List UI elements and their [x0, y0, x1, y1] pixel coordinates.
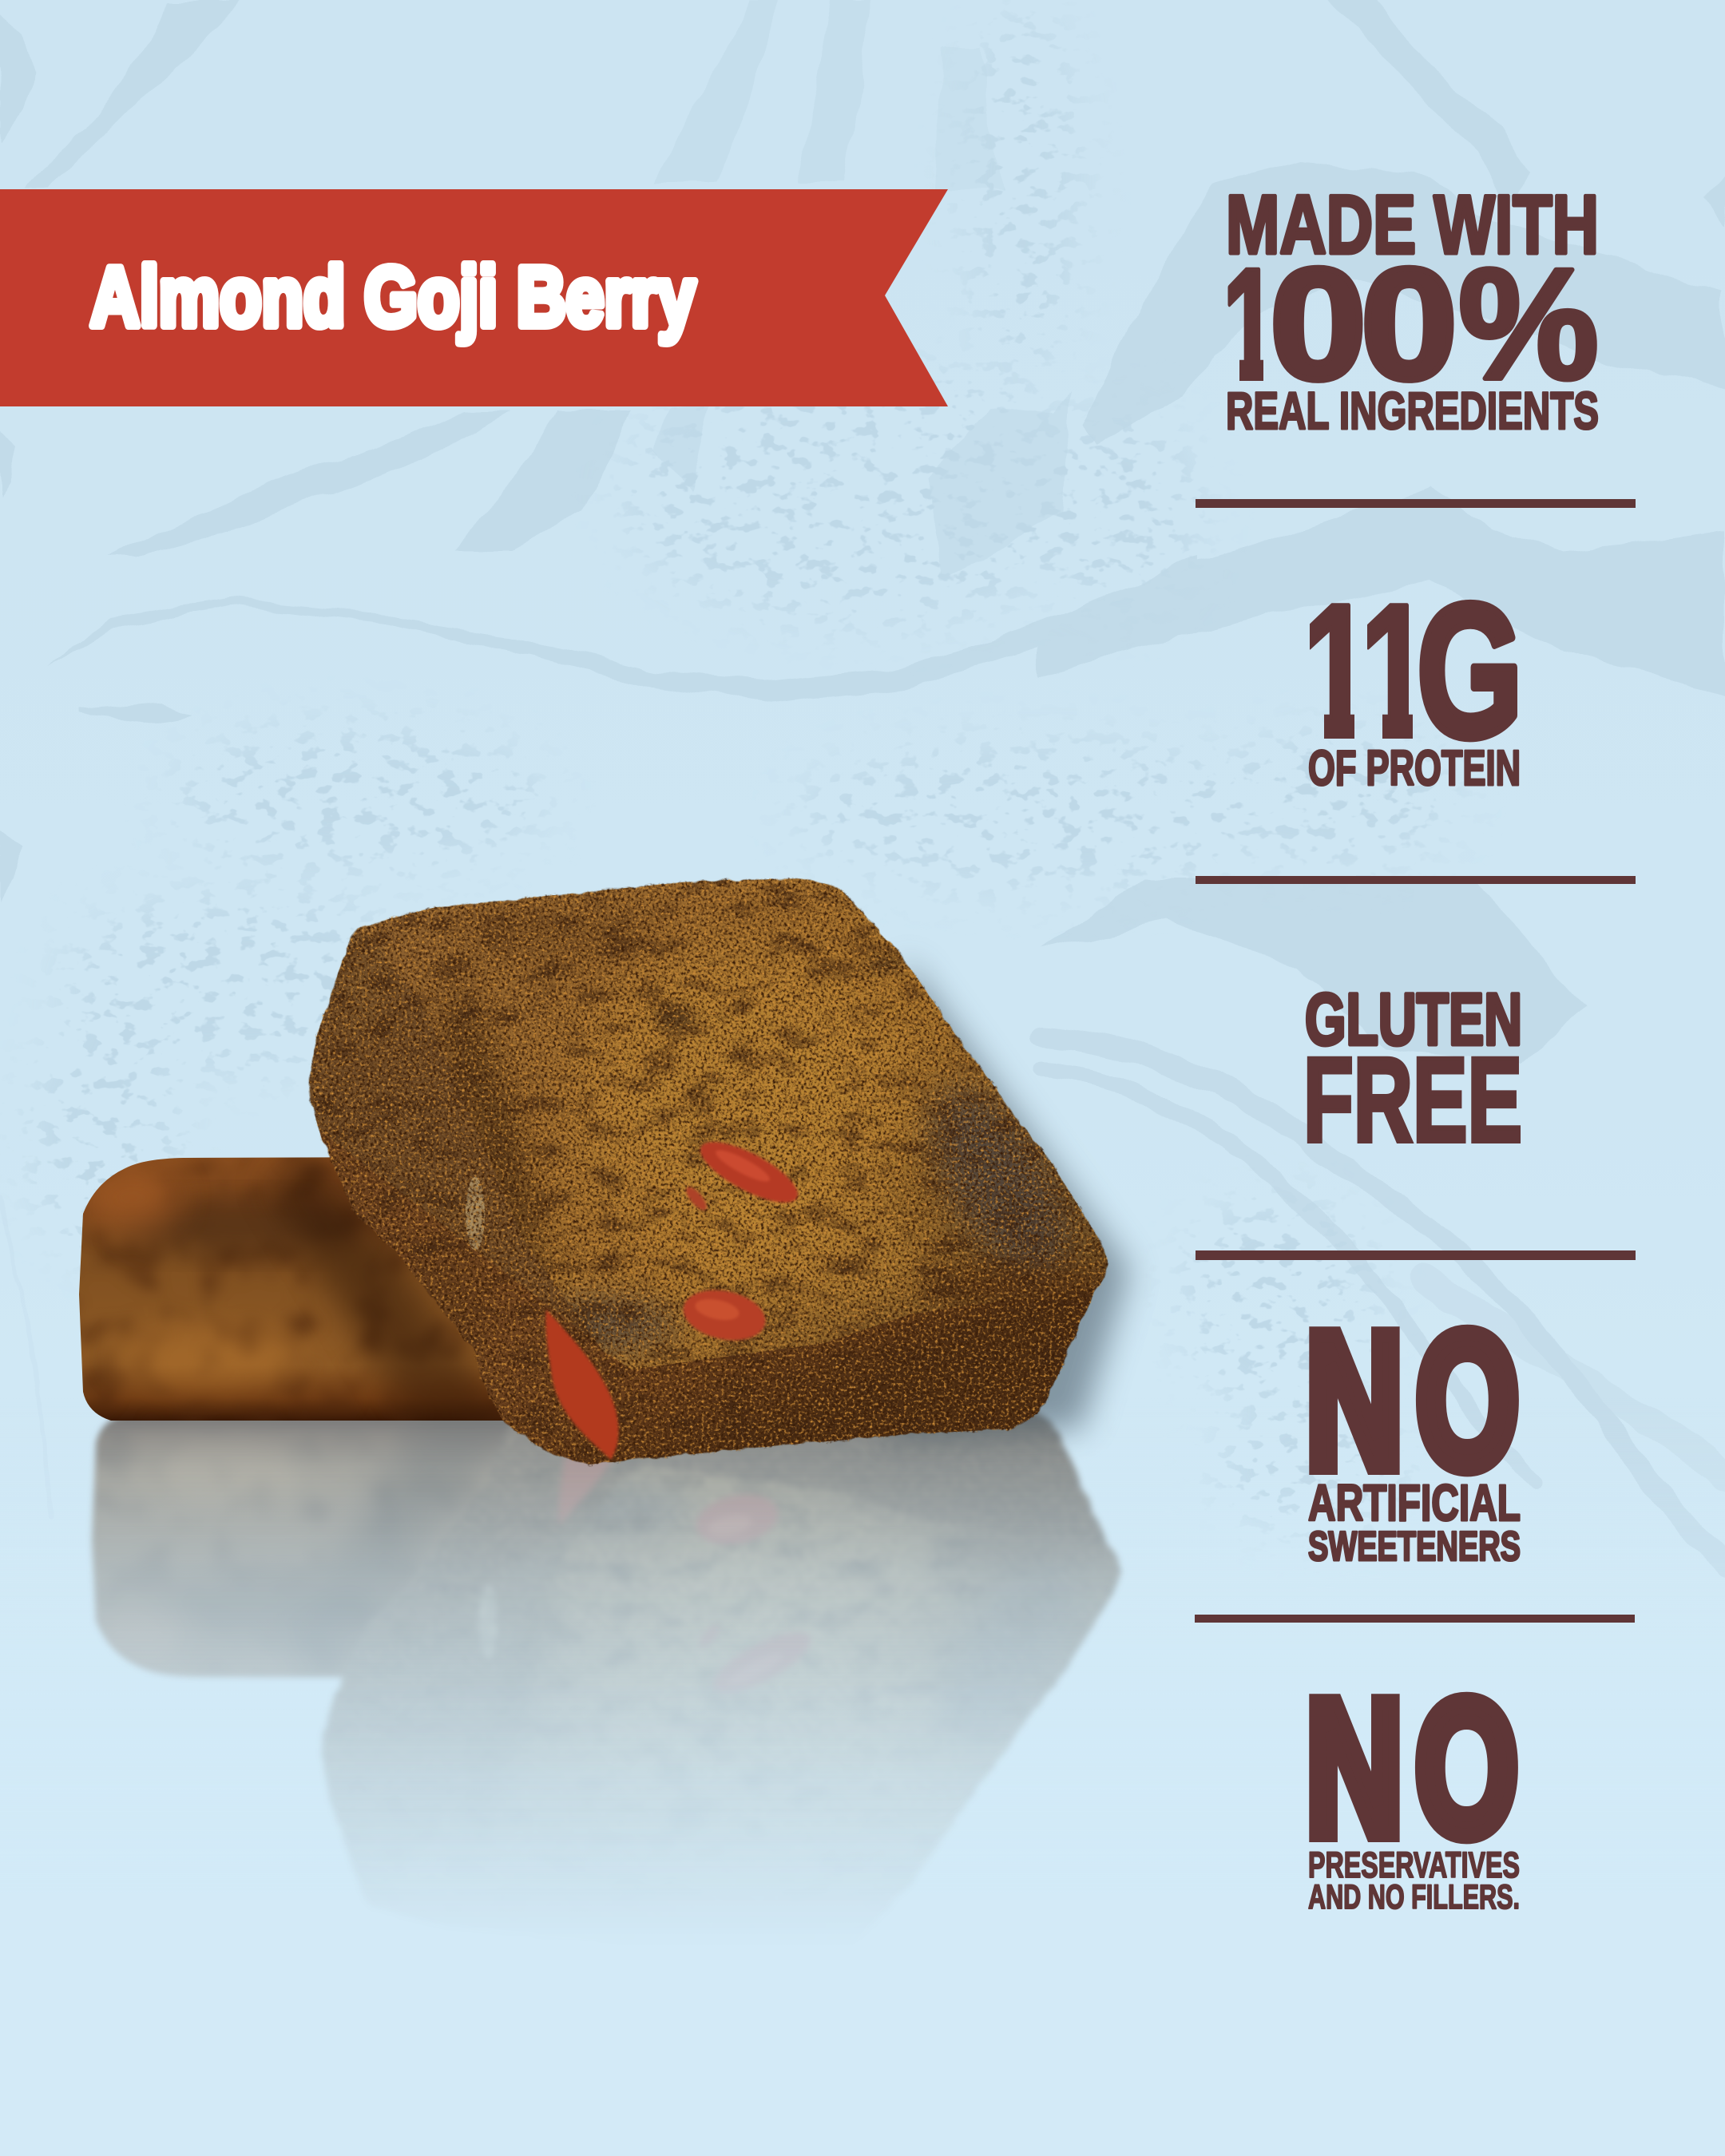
- nutrition claim: no artificial sweeteners: SWEETENERS: [1308, 1524, 1521, 1570]
- goji almond bars: [72, 878, 1126, 1469]
- nutrition claim: gluten free: [1303, 979, 1522, 1167]
- nutrition claim: 11g of protein: OF PROTEIN: [1308, 741, 1521, 796]
- almond piece: [466, 1177, 485, 1250]
- title ribbon: [0, 189, 948, 406]
- goji berry side: [545, 1310, 618, 1460]
- top face: [354, 878, 1110, 1369]
- figure 100%: [1223, 236, 1599, 412]
- lower swirl streams: [0, 1035, 1725, 1565]
- tonal patches: [432, 910, 1126, 1354]
- nutrition claim: no preservatives and no fillers: AND NO FILLERS.: [1308, 1878, 1520, 1916]
- nutrition claim: no artificial sweeteners: O: [1416, 1294, 1519, 1508]
- speckled brush texture: [32, 8, 1453, 1533]
- nutrition claim: no preservatives and no fillers: O: [1415, 1661, 1518, 1876]
- front face: [303, 1118, 1114, 1469]
- nutrition claim: 11g of protein: [1301, 565, 1523, 796]
- nutrition claim: no preservatives and no fillers: N: [1306, 1661, 1403, 1876]
- flavour name: Almond Goji Berry: [90, 250, 696, 344]
- left face shading: [335, 926, 383, 1038]
- nutrition claim: 100% real ingredients: MADE WITH: [1226, 179, 1599, 271]
- nutrition claim: gluten free: FREE: [1303, 1032, 1522, 1167]
- figure 100%: 1: [1223, 236, 1277, 412]
- front bar: [303, 878, 1126, 1469]
- figure 100%: 0: [1361, 236, 1457, 412]
- goji berry corner: [679, 1283, 770, 1347]
- nutrition claim: 11g of protein: G: [1417, 565, 1523, 777]
- nutrition claim: gluten free: GLUTEN: [1305, 979, 1522, 1060]
- nutrition claim: 11g of protein: 1: [1301, 565, 1373, 777]
- goji berry centre: [683, 1131, 806, 1214]
- nutrition claim: no artificial sweeteners: ARTIFICIAL: [1308, 1474, 1521, 1532]
- nutrition claim: no artificial sweeteners: N: [1306, 1294, 1403, 1508]
- nutrition claim: no preservatives and no fillers: [1306, 1661, 1520, 1916]
- bar drop shadow: [890, 958, 1129, 1437]
- nutrition claim: no artificial sweeteners: [1306, 1294, 1521, 1570]
- nutrition claim: 100% real ingredients: [1223, 179, 1599, 440]
- back bar: [72, 1150, 599, 1429]
- figure 100%: 0: [1270, 236, 1366, 412]
- figure 100%: %: [1458, 236, 1599, 412]
- nutrition claim: 11g of protein: 1: [1359, 565, 1431, 777]
- bar reflection on surface: [89, 1411, 1124, 1890]
- nutrition claim: no preservatives and no fillers: PRESERVATIVES: [1308, 1845, 1520, 1885]
